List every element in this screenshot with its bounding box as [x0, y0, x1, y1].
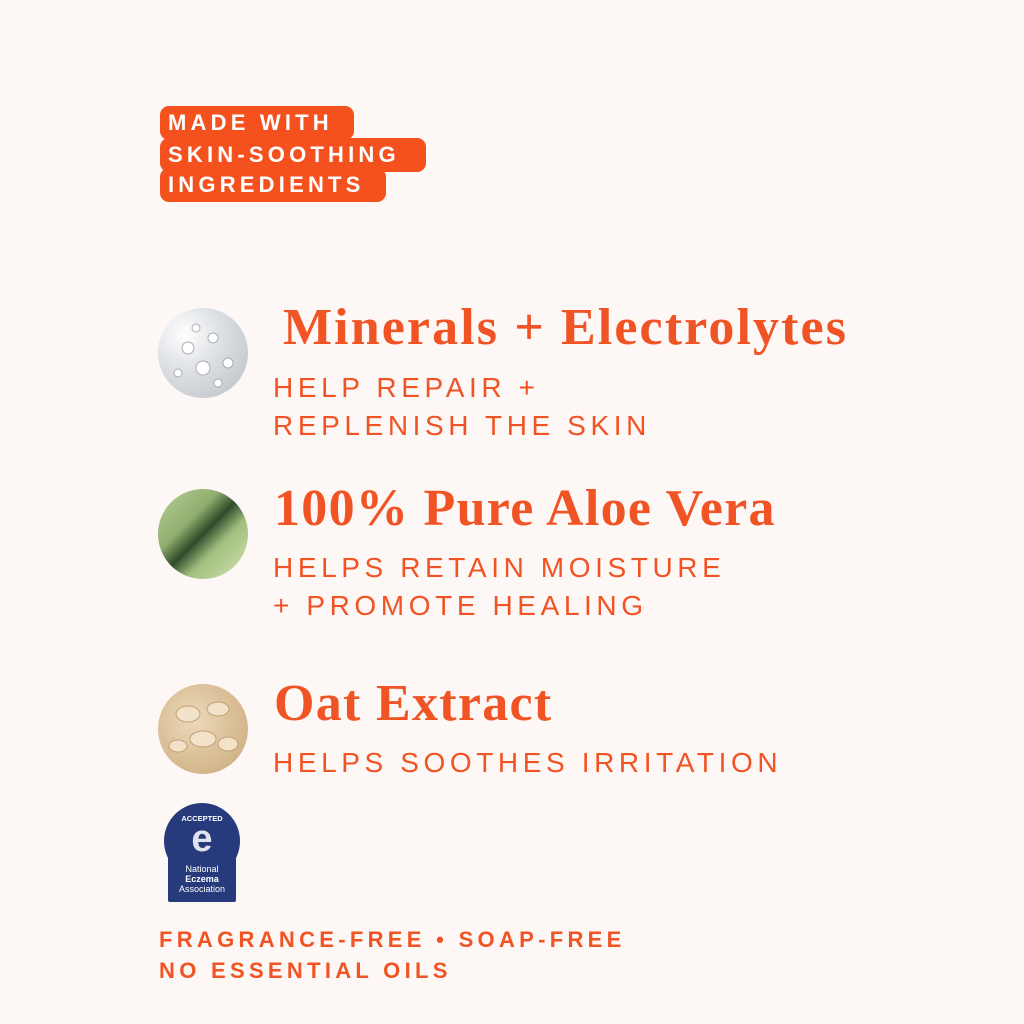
icon: NEA accepted logo: e	[191, 818, 213, 860]
text: minerals	[273, 372, 651, 441]
text: SKIN-SOOTHING	[168, 142, 400, 167]
text: MADE WITH	[168, 110, 333, 135]
icon: NEA accepted logo: ACCEPTED	[181, 814, 223, 823]
text: aloe: + PROMOTE HEALING	[273, 590, 648, 621]
text: minerals: HELP REPAIR +	[273, 372, 540, 403]
footer claims	[159, 927, 626, 983]
header badge	[160, 106, 426, 202]
text: minerals: REPLENISH THE SKIN	[273, 410, 651, 441]
icon: NEA accepted logo	[164, 803, 240, 902]
icon: oat	[158, 684, 248, 774]
heading: minerals: Minerals + Electrolytes	[283, 299, 848, 356]
heading: aloe: 100% Pure Aloe Vera	[274, 480, 776, 537]
heading: oat: Oat Extract	[274, 675, 553, 732]
footer claims: NO ESSENTIAL OILS	[159, 958, 452, 983]
icon: NEA accepted logo: National	[185, 864, 219, 874]
icon: NEA accepted logo: Eczema	[185, 874, 220, 884]
icon: aloe	[158, 489, 248, 579]
text: aloe: HELPS RETAIN MOISTURE	[273, 552, 725, 583]
text: oat: HELPS SOOTHES IRRITATION	[273, 747, 782, 778]
text: aloe	[273, 552, 725, 621]
text: INGREDIENTS	[168, 172, 365, 197]
icon: minerals	[158, 308, 248, 398]
icon: NEA accepted logo: Association	[179, 884, 225, 894]
footer claims: FRAGRANCE-FREE • SOAP-FREE	[159, 927, 626, 952]
